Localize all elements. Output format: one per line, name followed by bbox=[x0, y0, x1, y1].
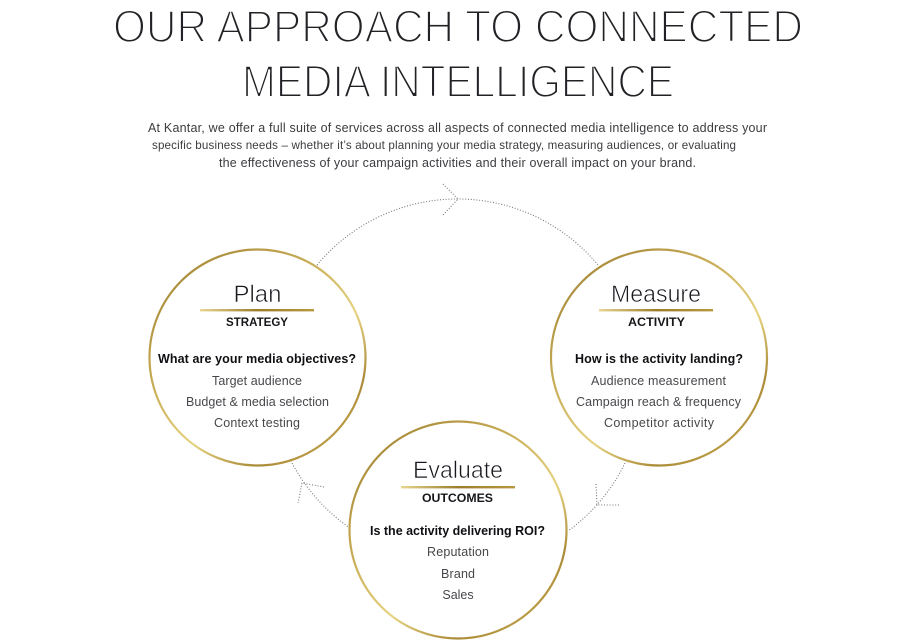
label: outcomes: OUTCOMES bbox=[422, 491, 493, 505]
text: plan details: Budget & media selection bbox=[186, 395, 329, 409]
title bbox=[113, 1, 803, 107]
text: plan details: What are your media objectives? bbox=[158, 352, 356, 366]
text: evaluate details bbox=[370, 524, 545, 602]
panel: plan bbox=[150, 250, 366, 466]
text: measure details: Campaign reach & frequency bbox=[576, 395, 742, 409]
text: measure details: How is the activity landing? bbox=[575, 352, 743, 366]
title: OUR APPROACH TO CONNECTED bbox=[113, 1, 803, 52]
text: plan details: Context testing bbox=[214, 416, 300, 430]
label: activity: ACTIVITY bbox=[628, 315, 685, 329]
text: evaluate details: Reputation bbox=[427, 545, 489, 559]
intro text: At Kantar, we offer a full suite of services across all aspects of connected media intelligence to address your bbox=[148, 121, 767, 135]
text: measure details: Competitor activity bbox=[604, 416, 715, 430]
intro text bbox=[148, 121, 767, 170]
text: evaluate details: Sales bbox=[442, 588, 474, 602]
label: strategy: STRATEGY bbox=[226, 315, 288, 329]
gold rule: measure bbox=[599, 309, 713, 311]
text: measure details bbox=[575, 352, 743, 430]
title: MEDIA INTELLIGENCE bbox=[242, 56, 674, 107]
text: evaluate details: Is the activity delivering ROI? bbox=[370, 524, 545, 538]
gold rule: plan bbox=[200, 309, 314, 311]
intro text: the effectiveness of your campaign activities and their overall impact on your brand. bbox=[219, 156, 696, 170]
heading: plan: Plan bbox=[233, 281, 282, 308]
text: plan details bbox=[158, 352, 356, 430]
text: plan details: Target audience bbox=[212, 374, 302, 388]
arrow: measure to evaluate bbox=[568, 463, 625, 531]
panel: measure bbox=[551, 250, 767, 466]
gold rule: evaluate bbox=[401, 486, 515, 488]
arrow: plan to measure bbox=[317, 184, 598, 265]
arrow: evaluate to plan bbox=[291, 461, 350, 528]
heading: evaluate: Evaluate bbox=[413, 457, 503, 484]
text: evaluate details: Brand bbox=[441, 567, 475, 581]
intro text: specific business needs – whether it’s about planning your media strategy, measuring audiences, or evaluating bbox=[152, 139, 736, 152]
panel: evaluate bbox=[350, 422, 566, 638]
heading: measure: Measure bbox=[611, 281, 701, 308]
text: measure details: Audience measurement bbox=[591, 374, 727, 388]
